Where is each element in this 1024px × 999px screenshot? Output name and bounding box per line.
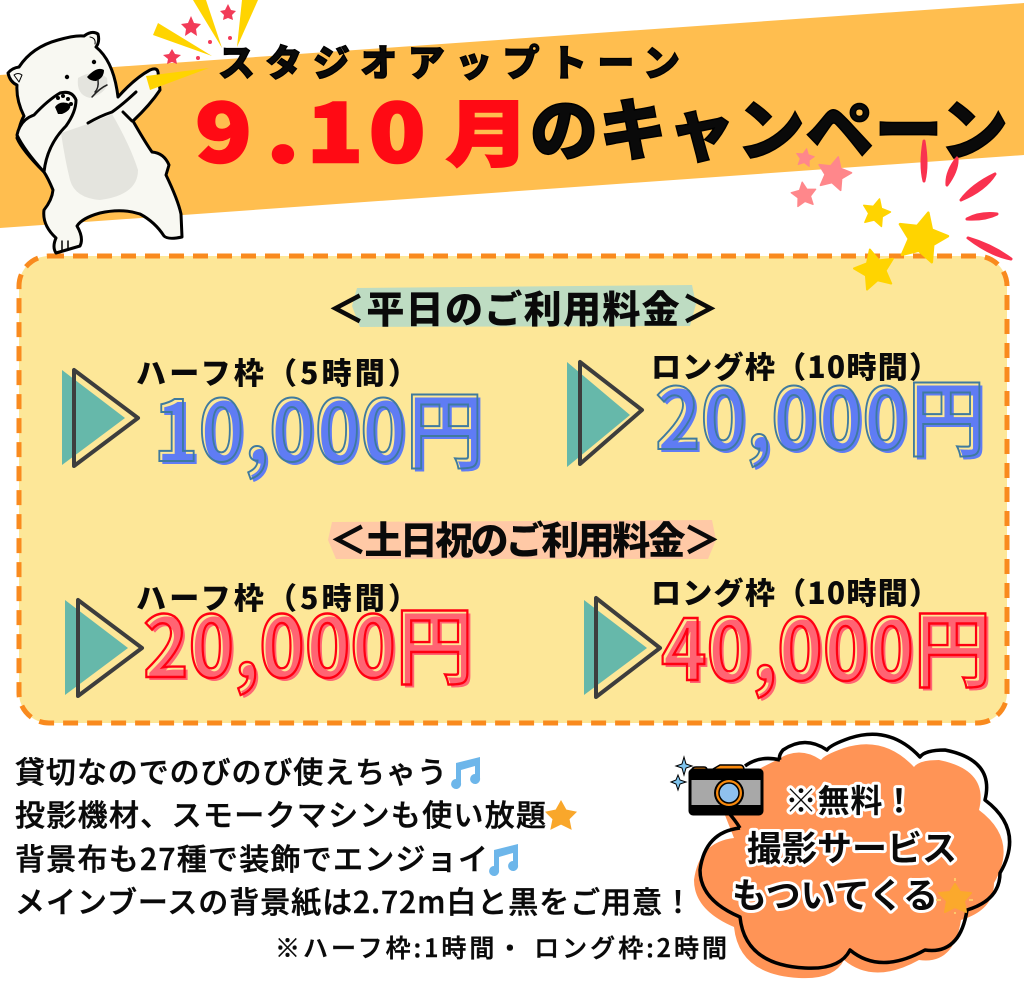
price: weekend long: ロング枠（10時間） (651, 569, 939, 613)
callout text: ※無料！ (785, 776, 915, 822)
price: weekday half: 10,000円 (153, 365, 483, 486)
price: weekday half: ハーフ枠（5時間） (136, 349, 418, 393)
price: weekend half: 20,000円 (146, 584, 476, 705)
heading: weekend pricing: ＜土日祝のご利用料金＞ (329, 510, 721, 565)
text block: features (15, 748, 693, 922)
price: weekend half: 20,000円 (143, 581, 473, 702)
price: weekend long (584, 569, 994, 708)
callout text: 撮影サービス (747, 821, 957, 872)
price: weekday long: 20,000円 (655, 353, 985, 474)
price: weekend long: 40,000円 (661, 584, 991, 705)
title: campaign months: 9 (195, 69, 252, 185)
callout: free photo service (694, 734, 1010, 978)
text block: features: メインブースの背景紙は2.72m白と黒をご用意！ (15, 878, 693, 922)
note: time limits: ※ハーフ枠:1時間・ ロング枠:2時間 (275, 929, 727, 965)
price: weekday long: ロング枠（10時間） (651, 343, 939, 387)
callout text (732, 776, 957, 919)
title: campaign months (196, 69, 529, 185)
icon: sparkle star 1 (546, 801, 576, 829)
price: weekday long (567, 343, 988, 477)
icon: burst rays and small stars (146, 0, 258, 90)
price: weekday half (62, 349, 486, 489)
text block: features: 投影機材、スモークマシンも使い放題 (15, 791, 546, 835)
title: campaign months: 1 (307, 69, 363, 185)
icon: music note 1 (451, 757, 480, 789)
price: weekend half: ハーフ枠（5時間） (136, 574, 418, 618)
icon: music note 2 (489, 844, 518, 876)
callout text: もついてくる (732, 868, 938, 919)
icon: callout star (936, 878, 973, 914)
title: campaign: のキャンペーン (530, 76, 1008, 175)
price: weekday half: 10,000円 (156, 368, 486, 489)
price: weekend long: 40,000円 (664, 587, 994, 708)
heading: weekday pricing: ＜平日のご利用料金＞ (327, 279, 719, 334)
title: campaign months: 0 (369, 69, 425, 185)
text block: features: 背景布も27種で装飾でエンジョイ (15, 835, 488, 879)
title: campaign months: 月 (446, 77, 529, 181)
text block: features: 貸切なのでのびのび使えちゃう (15, 748, 447, 792)
icon: decorative stars (790, 141, 1011, 291)
icon: polar bear (8, 32, 182, 253)
price: weekday long: 20,000円 (658, 356, 988, 477)
icon: camera (671, 757, 762, 814)
panel: pricing (19, 256, 1007, 723)
header band (0, 3, 1024, 228)
title: campaign months: . (267, 69, 299, 185)
title: studio name: スタジオアップトーン (218, 33, 680, 87)
